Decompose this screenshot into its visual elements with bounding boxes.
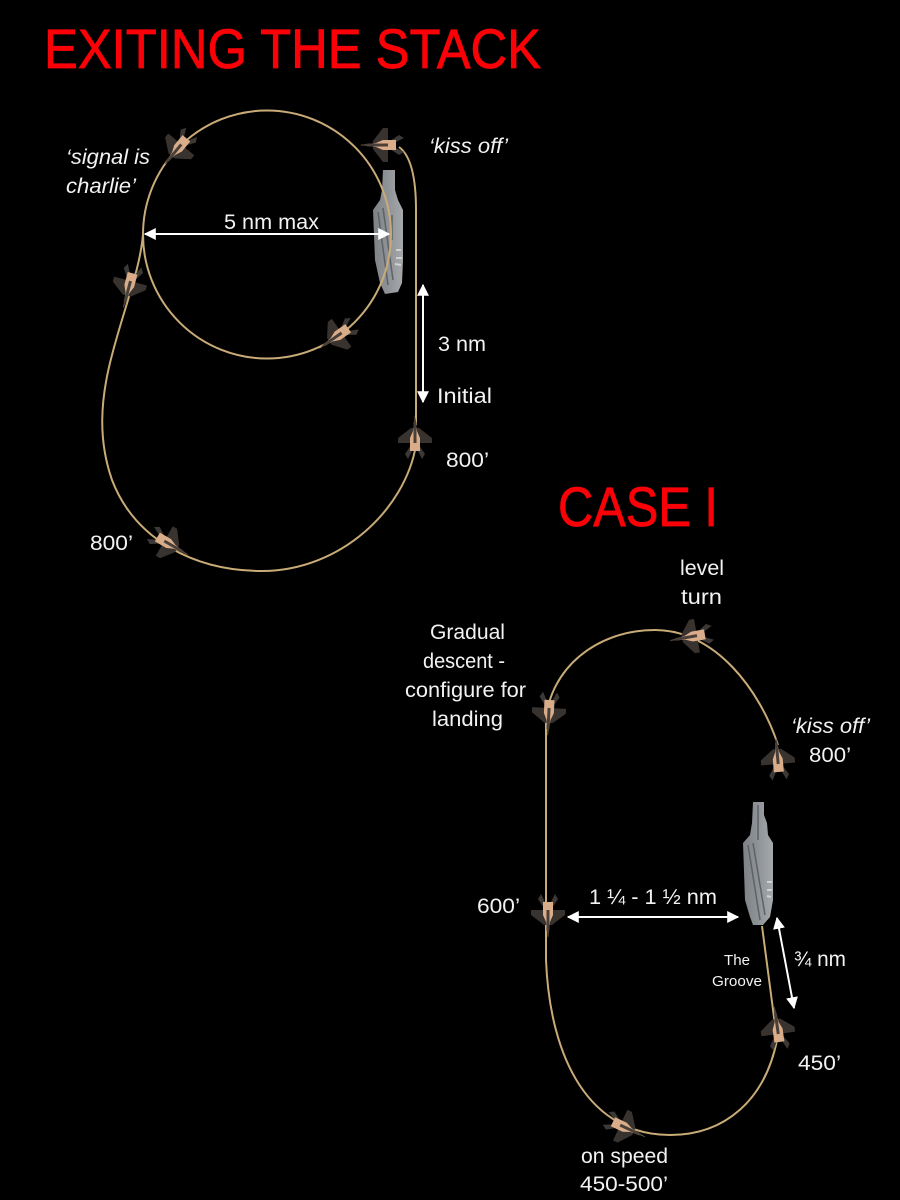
arrow: abeam distance bbox=[568, 916, 738, 918]
label: kiss off: ‘kiss off’ bbox=[791, 715, 870, 738]
label: 5 nm max: 5 nm max bbox=[224, 211, 320, 234]
icon: jet at initial bbox=[398, 415, 432, 459]
title: case I: CASE I bbox=[558, 475, 718, 538]
label: 450 feet: 450’ bbox=[798, 1052, 841, 1075]
label: the groove: The bbox=[724, 952, 750, 969]
label: 800 feet initial: 800’ bbox=[446, 449, 489, 472]
label: 450-500 feet: 450-500’ bbox=[580, 1173, 668, 1196]
arrow: groove length bbox=[777, 918, 794, 1008]
icon: jet level turn bbox=[666, 616, 716, 657]
diagram: case I bbox=[405, 557, 870, 1196]
label: three quarter nm: ¾ nm bbox=[794, 948, 846, 971]
icon: jet upper left of circle bbox=[150, 121, 205, 177]
label: signal is charlie: ‘signal is bbox=[66, 146, 151, 169]
icon: jet lower circle bbox=[309, 310, 364, 363]
label: 800 feet abeam: 800’ bbox=[90, 532, 133, 555]
icon: jet gradual descent bbox=[531, 691, 567, 737]
label: charlie: charlie’ bbox=[66, 175, 136, 198]
label: level: level bbox=[680, 557, 724, 580]
diagram: exiting the stack bbox=[66, 110, 508, 571]
label: descent: descent - bbox=[423, 650, 505, 673]
icon: jet left of circle bbox=[107, 261, 151, 313]
arrow: 5 nm max bbox=[145, 233, 389, 235]
flight path: pattern bbox=[546, 630, 778, 1135]
label: on speed: on speed bbox=[581, 1145, 668, 1168]
label: abeam distance: 1 ¼ - 1 ½ nm bbox=[589, 886, 717, 909]
icon: jet groove bbox=[758, 1004, 797, 1052]
label: landing: landing bbox=[432, 708, 503, 731]
label: turn: turn bbox=[681, 586, 722, 609]
flight path: downwind and initial bbox=[399, 147, 416, 425]
icon: aircraft carrier bbox=[373, 170, 403, 294]
icon: jet on speed bbox=[599, 1103, 653, 1152]
arrow: 3 nm bbox=[422, 285, 424, 402]
title: exiting the stack: EXITING THE STACK bbox=[44, 17, 541, 80]
label: groove: Groove bbox=[712, 973, 762, 990]
label: 800 feet: 800’ bbox=[809, 744, 851, 767]
icon: aircraft carrier bbox=[743, 802, 773, 925]
flight path: lower turn bbox=[102, 234, 416, 571]
label: configure for: configure for bbox=[405, 679, 526, 702]
label: kiss off: ‘kiss off’ bbox=[429, 135, 508, 158]
label: 3 nm: 3 nm bbox=[438, 333, 486, 356]
flight path: break circle bbox=[143, 110, 391, 358]
label: initial: Initial bbox=[437, 385, 492, 408]
icon: jet abeam bbox=[531, 894, 565, 938]
label: 600 feet: 600’ bbox=[477, 895, 520, 918]
icon: jet at kiss off bbox=[360, 128, 404, 162]
icon: jet lower turn bbox=[142, 518, 197, 570]
icon: jet kiss off bbox=[759, 735, 797, 781]
label: gradual: Gradual bbox=[430, 621, 505, 644]
